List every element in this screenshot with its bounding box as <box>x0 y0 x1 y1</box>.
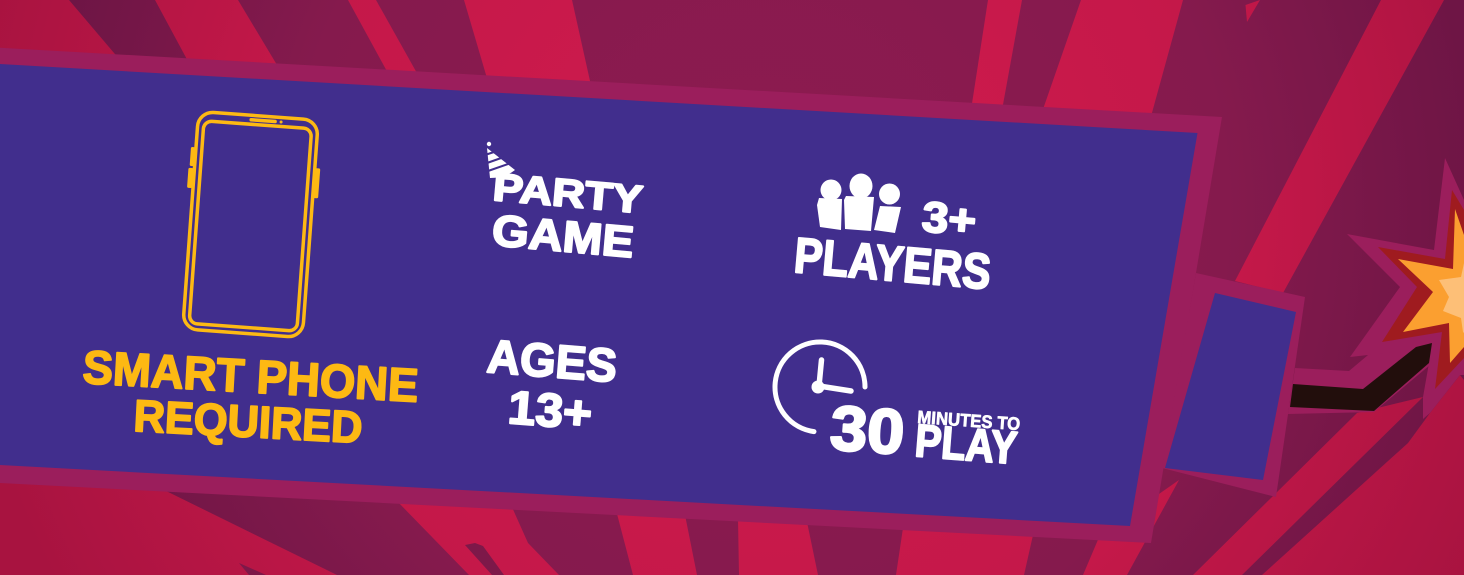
icon: explosion spark <box>1347 158 1464 419</box>
text: ages 13+ <box>485 329 619 440</box>
panel: bomb cap border <box>1162 273 1305 497</box>
text: 3+ players: 3+ <box>920 193 978 246</box>
text: 30 minutes to play: PLAY <box>913 414 1019 474</box>
text: party game: PARTY <box>491 166 644 222</box>
panel: fuse outline <box>1288 320 1432 414</box>
icon: clock <box>775 342 865 432</box>
text: 30 minutes to play: 30 <box>828 393 907 468</box>
panel: bomb body <box>0 64 1198 526</box>
icon: three players <box>817 174 901 233</box>
text: 3+ players: PLAYERS <box>792 227 993 300</box>
panel: bomb body border <box>0 48 1222 543</box>
icon: party hat <box>485 142 515 178</box>
text: ages 13+: AGES <box>485 329 619 392</box>
text: 3+ players <box>792 193 993 300</box>
icon: fuse <box>1290 343 1432 411</box>
background: dark islands <box>239 543 504 575</box>
text: 30 minutes to play: MINUTES TO <box>917 407 1021 434</box>
text: 30 minutes to play <box>828 393 1021 474</box>
text: ages 13+: 13+ <box>506 380 594 440</box>
heading: smart phone required: SMART PHONE <box>81 340 420 412</box>
text: party game <box>490 166 644 267</box>
text: party game: GAME <box>490 206 636 267</box>
panel: bomb cap <box>1165 293 1296 480</box>
heading: smart phone required <box>81 340 420 453</box>
icon: smartphone <box>177 111 324 338</box>
heading: smart phone required: REQUIRED <box>132 390 364 453</box>
